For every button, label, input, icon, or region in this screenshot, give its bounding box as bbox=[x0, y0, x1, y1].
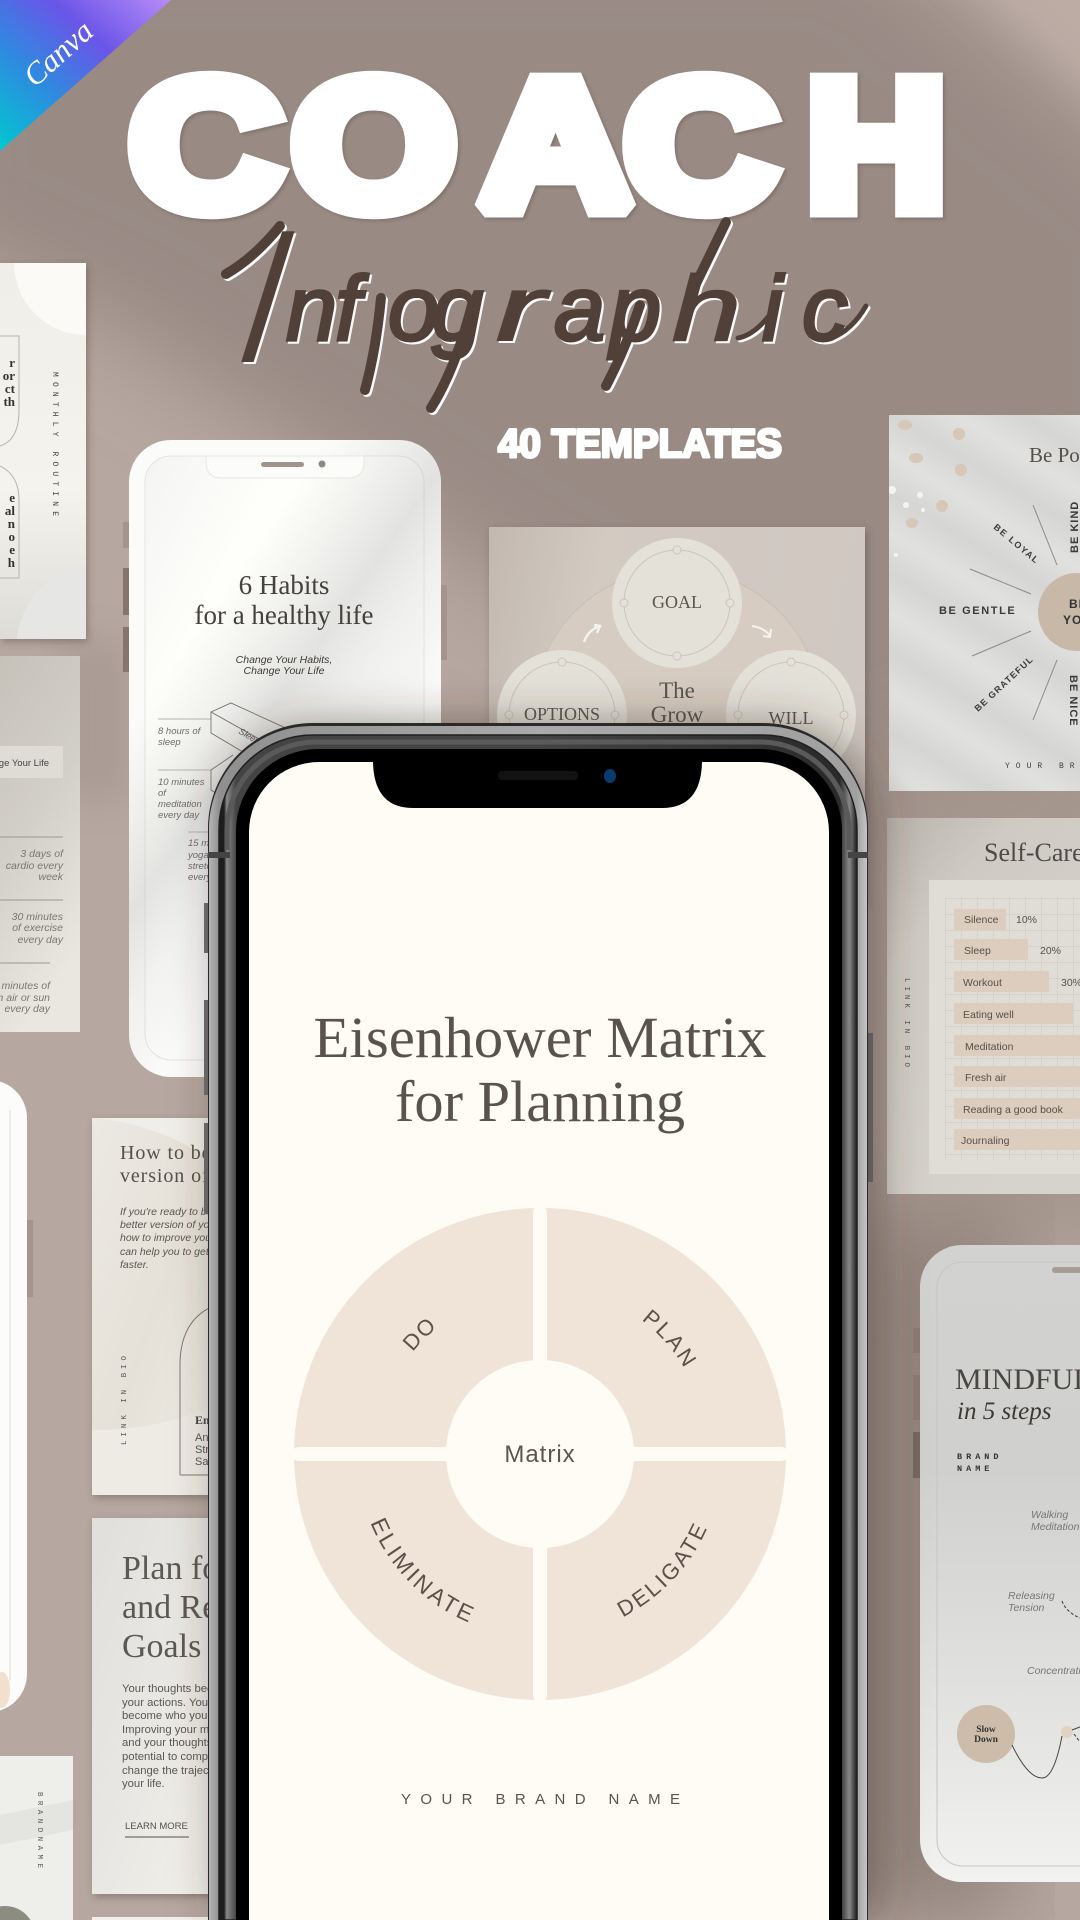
habits list labels: 8 hours of bbox=[158, 726, 202, 737]
left card: cardio habits: 30 minutes bbox=[12, 911, 64, 923]
infographic script title bbox=[226, 191, 866, 408]
main phone bbox=[186, 691, 908, 1920]
habits list labels: every day bbox=[188, 872, 230, 883]
card: self-care chart: Sleep bbox=[964, 945, 991, 957]
40 templates label: 40 TEMPLATES bbox=[498, 422, 782, 466]
card: plan for goals: and your thoughts bbox=[122, 1737, 213, 1749]
card: self-care chart: Reading a good book bbox=[963, 1104, 1064, 1116]
speaker and camera bbox=[498, 769, 616, 783]
card: the grow model: WILL bbox=[769, 708, 813, 728]
left card: monthly routine: al bbox=[5, 503, 15, 518]
habits subtitle: Change Your Life bbox=[244, 665, 325, 677]
phone: mindful steps: Walking bbox=[1031, 1509, 1068, 1521]
card: how to become: Strive bbox=[195, 1444, 223, 1456]
card: self-care chart: LINK IN BIO bbox=[902, 978, 910, 1067]
coach title: H bbox=[807, 42, 946, 247]
card: plan for goals: Goals bbox=[122, 1628, 201, 1665]
card: be positive: BE LOYAL bbox=[992, 522, 1042, 566]
infographic script title: r bbox=[496, 258, 550, 360]
card: self-care chart: Workout bbox=[963, 977, 1002, 989]
left card: cardio habits: every day bbox=[17, 934, 64, 946]
card: the grow model: Grow bbox=[651, 702, 704, 727]
card: the grow model: OPTIONS bbox=[524, 704, 600, 724]
card: brandname: BRANDNAME bbox=[35, 1792, 43, 1868]
card: plan for goals: and Reach bbox=[122, 1589, 265, 1626]
card: self-care chart: Fresh air bbox=[965, 1072, 1007, 1084]
phone: 6 habits: Sleep bbox=[237, 726, 262, 746]
card: self-care chart: Meditation bbox=[965, 1041, 1014, 1053]
left card: cardio habits: week bbox=[38, 871, 64, 883]
script letters: I bbox=[229, 191, 303, 403]
side buttons bbox=[204, 903, 873, 1214]
matrix wheel: ELIMINATE bbox=[371, 1518, 474, 1622]
habits list labels: 15 minutes bbox=[188, 838, 235, 849]
left card: monthly routine: MONTHLY ROUTINE bbox=[50, 372, 59, 516]
phone: mindful steps: Down bbox=[974, 1735, 999, 1745]
card: self-care chart bbox=[887, 818, 1080, 1194]
phone: 6 habits bbox=[123, 440, 447, 1077]
card: how to become: LINK IN BIO bbox=[121, 1356, 129, 1445]
card: the grow model bbox=[489, 527, 865, 903]
card: how to become: better version of yourself bbox=[120, 1219, 236, 1231]
habits list labels: yoga bbox=[187, 850, 209, 861]
coach title: COAC bbox=[130, 42, 776, 247]
card: how to become: version of yours bbox=[120, 1165, 264, 1187]
left card: monthly routine: n bbox=[8, 516, 16, 531]
card: plan for goals: change the trajectory bbox=[122, 1765, 228, 1777]
habits title: for a healthy life bbox=[194, 600, 374, 630]
phone: mindful steps: Meditation bbox=[1031, 1521, 1080, 1533]
habits list labels: of bbox=[158, 788, 167, 799]
card: self-care chart: Journaling bbox=[961, 1135, 1010, 1147]
matrix wheel: DELIGATE bbox=[616, 1523, 707, 1617]
card: be positive: BE NICE bbox=[1067, 675, 1079, 727]
left card: monthly routine: r bbox=[9, 355, 15, 370]
habits list labels: 10 minutes bbox=[158, 777, 205, 788]
matrix title: Eisenhower Matrix bbox=[314, 1005, 766, 1070]
left card: monthly routine bbox=[0, 191, 168, 734]
card: how to become bbox=[92, 1118, 264, 1495]
left card: monthly routine: o bbox=[8, 529, 15, 544]
card: self-care chart: 20% bbox=[1040, 945, 1061, 957]
phone: mindful steps bbox=[913, 1245, 1080, 1882]
card: plan for goals: LEARN MORE bbox=[125, 1821, 188, 1832]
card: the grow model: The bbox=[659, 678, 695, 703]
card: how to become: can help you to get there bbox=[120, 1246, 236, 1258]
left card: monthly routine: th bbox=[3, 394, 16, 409]
card: brandname bbox=[0, 1756, 73, 1920]
left card: monthly routine: e bbox=[9, 490, 15, 505]
infographic script title: h bbox=[672, 258, 741, 360]
habits title: 6 Habits bbox=[239, 570, 329, 600]
habits subtitle: Change Your Habits, bbox=[236, 654, 332, 666]
phone: mindful steps: NAME bbox=[957, 1464, 993, 1474]
card: plan for goals: your life. bbox=[122, 1778, 165, 1790]
infographic script title: ic bbox=[762, 258, 848, 360]
left card: monthly routine: ct bbox=[5, 381, 16, 396]
notch bbox=[368, 755, 707, 808]
metal frame bbox=[208, 723, 868, 1920]
card: how to become: Analyze bbox=[195, 1432, 234, 1444]
habits list labels: meditation bbox=[158, 799, 202, 810]
card: how to become: faster. bbox=[120, 1259, 149, 1271]
left card: cardio habits bbox=[0, 656, 80, 1032]
habits list labels: stretch bbox=[188, 861, 217, 872]
phone: mindful steps: Tension bbox=[1008, 1602, 1045, 1614]
left card: cardio habits: of exercise bbox=[12, 922, 63, 934]
matrix wheel bbox=[294, 1208, 786, 1700]
canva corner ribbon bbox=[0, 0, 171, 151]
phone: mindful steps: BRAND bbox=[957, 1452, 1003, 1462]
card: plan for goals: Your thoughts become bbox=[122, 1683, 235, 1695]
card: how to become: How to become bbox=[120, 1142, 258, 1164]
left card: cardio habits: 3 days of bbox=[20, 848, 64, 860]
black bezel bbox=[236, 749, 842, 1920]
left card: cardio habits: cardio every bbox=[6, 860, 64, 872]
card: be positive: BE GENTLE bbox=[939, 605, 1016, 617]
left card: cardio habits: every day bbox=[4, 1003, 51, 1015]
card: how to become: Sample bbox=[195, 1456, 232, 1468]
canva label: Canva bbox=[16, 13, 100, 93]
card: plan for goals: your actions. Your bbox=[122, 1697, 212, 1709]
phone: mindful steps: in 5 steps bbox=[957, 1398, 1051, 1425]
card: the grow model: GOAL bbox=[652, 592, 702, 612]
matrix title: for Planning bbox=[395, 1069, 685, 1134]
left card: monthly routine: e bbox=[9, 542, 15, 557]
card: plan for goals bbox=[92, 1518, 265, 1894]
left phone edge bbox=[0, 1080, 33, 1712]
left card: monthly routine: or bbox=[3, 368, 15, 383]
card: self-care chart: Eating well bbox=[963, 1009, 1014, 1021]
wheel centre label: Matrix bbox=[504, 1441, 576, 1468]
swash strokes bbox=[226, 222, 866, 408]
matrix wheel: PLAN bbox=[642, 1310, 696, 1366]
habits list labels: sleep bbox=[158, 737, 181, 748]
wheel labels: DO bbox=[402, 1320, 434, 1351]
card: plan for goals: become who you are. bbox=[122, 1710, 230, 1722]
phone: mindful steps: Slow bbox=[976, 1725, 996, 1735]
left card: monthly routine: h bbox=[8, 555, 16, 570]
card: how to become: Embrace bbox=[195, 1413, 242, 1427]
card: be positive: BE GRATEFUL bbox=[973, 654, 1035, 713]
isometric step blocks bbox=[211, 703, 290, 805]
card: how to become: If you're ready to be a bbox=[120, 1206, 221, 1218]
habits list labels: every day bbox=[158, 810, 200, 821]
infographic script title: ap bbox=[554, 258, 661, 360]
card: be positive bbox=[889, 415, 1080, 791]
infographic script title: nfog bbox=[286, 258, 483, 360]
card: self-care chart: Silence bbox=[964, 914, 999, 926]
card: plan for goals: Plan for bbox=[122, 1550, 231, 1587]
card: how to become: how to improve yourself bbox=[120, 1232, 232, 1244]
screen bbox=[249, 762, 829, 1920]
brand name: YOUR BRAND NAME bbox=[401, 1791, 680, 1808]
card: bottom sliver bbox=[92, 1917, 212, 1920]
card: self-care chart: 10% bbox=[1016, 914, 1037, 926]
card: plan for goals: potential to complete bbox=[122, 1751, 226, 1763]
phone: mindful steps: Releasing bbox=[1008, 1590, 1055, 1602]
card: plan for goals: Improving your mind bbox=[122, 1724, 224, 1736]
